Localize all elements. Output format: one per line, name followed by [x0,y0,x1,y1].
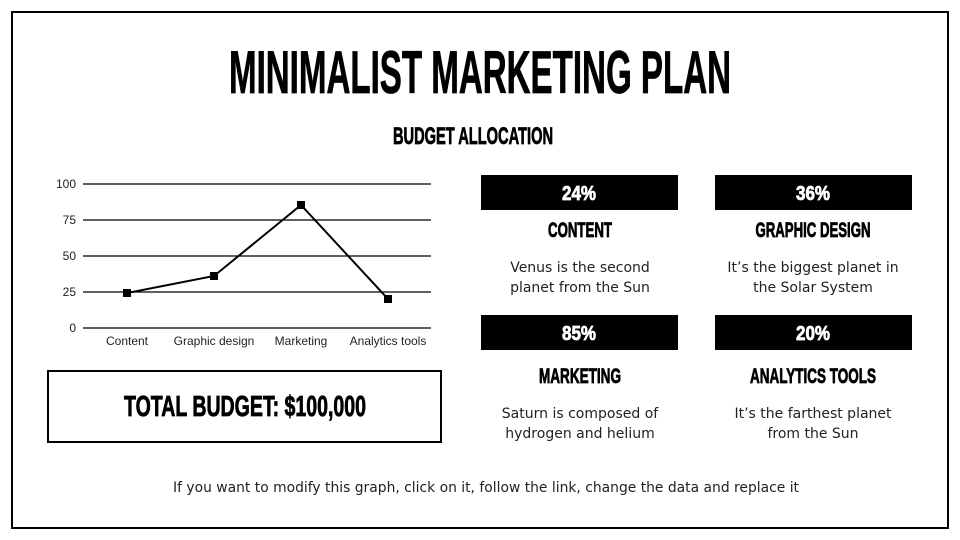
stat: content [481,175,678,296]
line chart: Marketing [275,334,327,348]
stat: marketing: Saturn is composed of [502,406,659,422]
line chart: Analytics tools [350,334,426,348]
line chart: 100 [56,177,76,191]
stat: marketing: MARKETING [539,365,621,388]
stat: graphic design: 36% [796,183,830,205]
stat: graphic design [715,175,912,296]
stat: content: 24% [562,183,596,205]
stat: analytics tools: It’s the farthest planet [734,406,892,422]
stat: marketing [481,315,678,442]
line chart: 75 [63,213,76,227]
stat: marketing: 85% [562,323,596,345]
stat: graphic design: It’s the biggest planet in [727,260,899,276]
stat: analytics tools [715,315,912,442]
line chart: Graphic design [174,334,254,348]
stat: analytics tools: ANALYTICS TOOLS [750,365,876,388]
line chart: 0 [69,321,76,335]
stat: analytics tools: from the Sun [767,426,859,442]
total budget box [48,371,441,442]
line chart [56,177,431,348]
subtitle: budget allocation: BUDGET ALLOCATION [393,123,553,150]
stat: graphic design: GRAPHIC DESIGN [756,219,870,242]
line chart: 50 [63,249,76,263]
line chart: Content [106,334,149,348]
total budget box: TOTAL BUDGET: $100,000 [124,391,366,423]
line chart: 25 [63,285,76,299]
footer note: If you want to modify this graph, click on it, follow the link, change the data and replace it [173,480,799,496]
stat: content: CONTENT [548,219,612,242]
stat: marketing: hydrogen and helium [505,426,655,442]
stat: analytics tools: 20% [796,323,830,345]
stat: graphic design: the Solar System [753,280,873,296]
stat: content: Venus is the second [510,260,650,276]
stat: content: planet from the Sun [510,280,650,296]
